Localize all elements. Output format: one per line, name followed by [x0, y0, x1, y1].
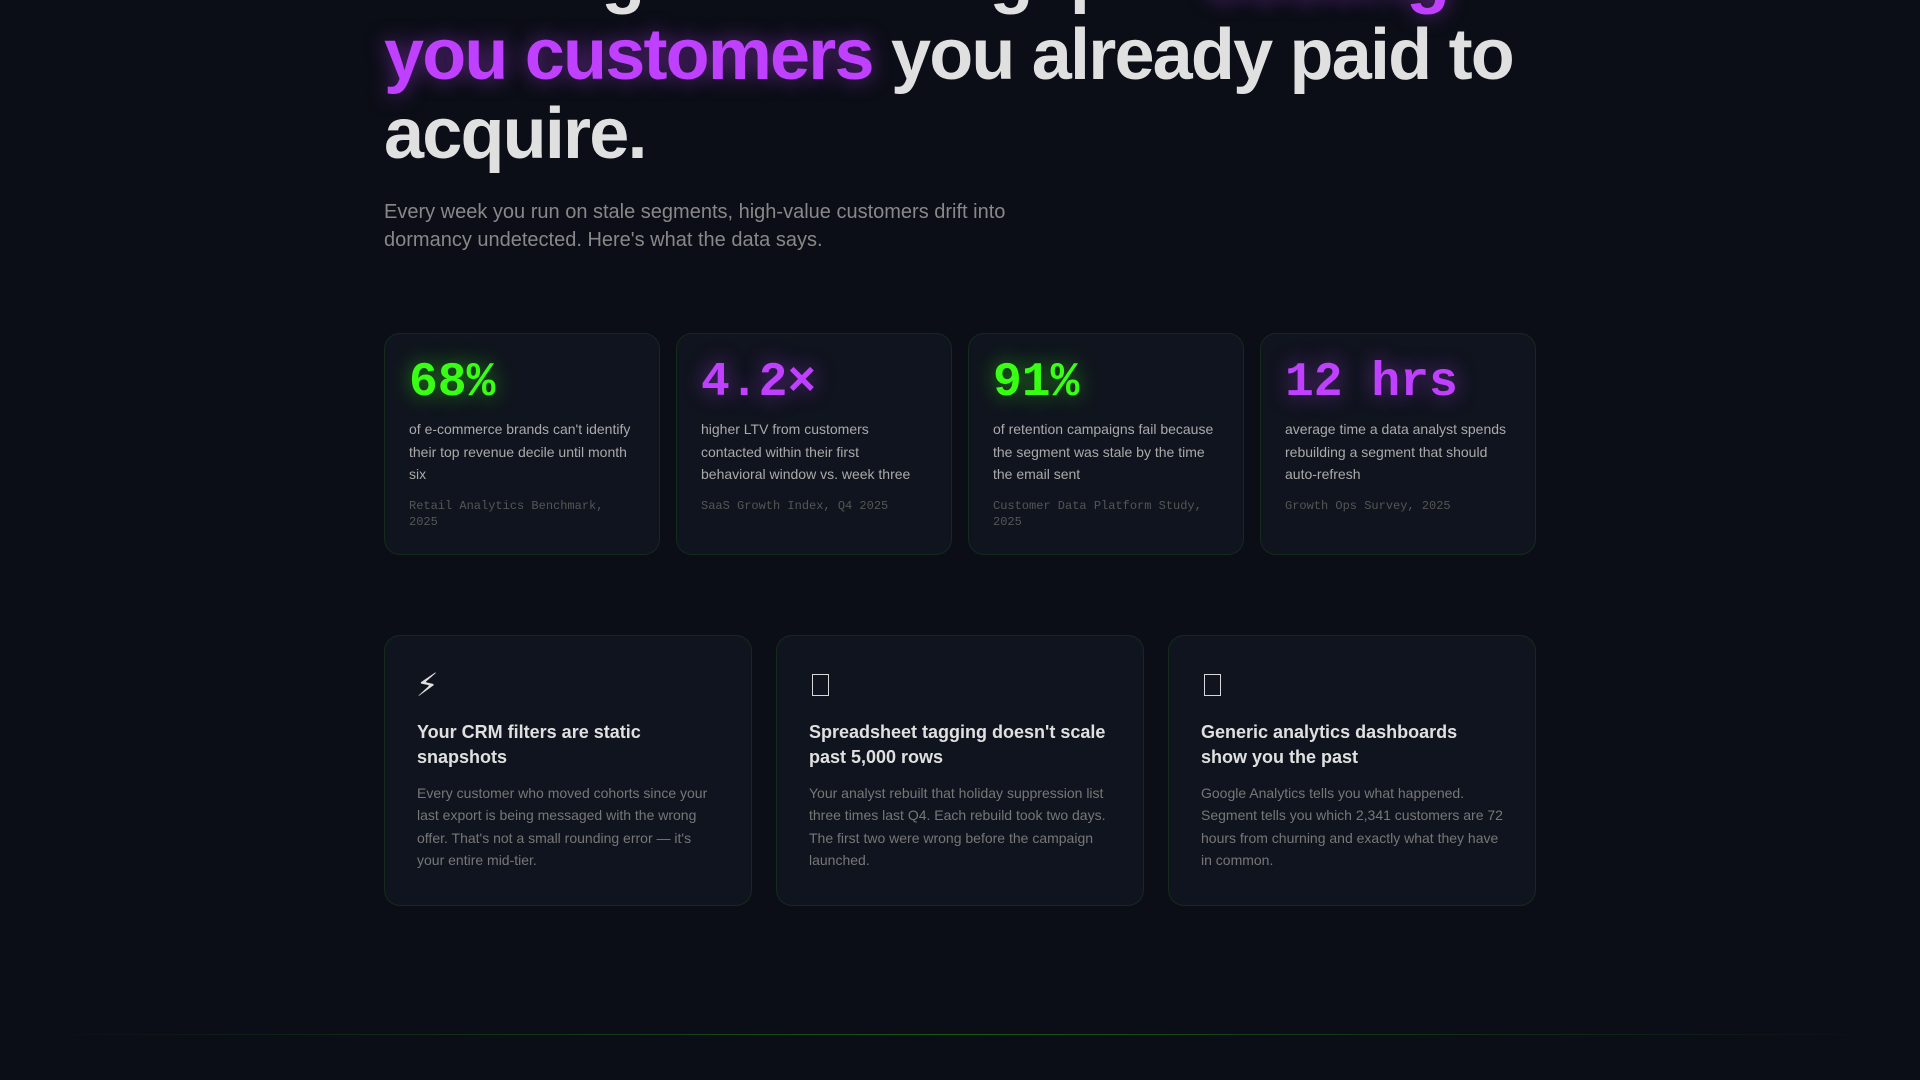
panel: problem cards row	[384, 635, 1536, 906]
stat card: 91%: 91%	[993, 356, 1079, 410]
icon: lightning: ⚡︎	[416, 666, 438, 704]
stat card: 4.2x: higher LTV from customers contacted within their first behavioral window vs. week three	[701, 421, 910, 482]
stat card: 68%	[384, 333, 660, 555]
card heading: Generic analytics dashboards show you the past	[1201, 722, 1457, 767]
problem card: CRM filters	[384, 635, 752, 906]
card heading: Your CRM filters are static snapshots	[417, 722, 641, 767]
problem card: spreadsheet tagging	[776, 635, 1144, 906]
stat card: 4.2x	[676, 333, 952, 555]
stat card: 68%: 68%	[409, 356, 495, 410]
icon: empty glyph box	[812, 674, 829, 696]
stat card: 12 hrs: average time a data analyst spends rebuilding a segment that should auto-refresh	[1285, 421, 1506, 482]
stat card: 12 hrs: Growth Ops Survey, 2025	[1285, 499, 1451, 513]
stat card: 91%: of retention campaigns fail because the segment was stale by the time the email sent	[993, 421, 1213, 482]
card text: Your analyst rebuilt that holiday suppression list three times last Q4. Each rebuild took two days. The first two were wrong before the campaign launched.	[809, 785, 1105, 868]
card text: Every customer who moved cohorts since your last export is being messaged with the wrong offer. That's not a small rounding error — it's your entire mid-tier.	[417, 785, 707, 868]
stat card: 4.2x: 4.2×	[701, 356, 816, 410]
subtitle: Every week you run on stale segments, high-value customers drift into dormancy undetected. Here's what the data says.	[384, 201, 1005, 251]
stat card: 91%: Customer Data Platform Study, 2025	[993, 499, 1202, 529]
stat card: 12 hrs	[1260, 333, 1536, 555]
stat card: 4.2x: SaaS Growth Index, Q4 2025	[701, 499, 888, 513]
icon: empty glyph box	[1204, 674, 1221, 696]
card text: Google Analytics tells you what happened. Segment tells you which 2,341 customers are 72 hours from churning and exactly what they have in common.	[1201, 785, 1503, 868]
stat card: 68%: Retail Analytics Benchmark, 2025	[409, 499, 603, 529]
stat card: 12 hrs: 12 hrs	[1285, 356, 1458, 410]
stat card: 68%: of e-commerce brands can't identify their top revenue decile until month six	[409, 421, 630, 482]
problem card: analytics dashboards	[1168, 635, 1536, 906]
panel: statistics row	[384, 333, 1536, 555]
card heading: Spreadsheet tagging doesn't scale past 5,000 rows	[809, 722, 1105, 767]
stat card: 91%	[968, 333, 1244, 555]
